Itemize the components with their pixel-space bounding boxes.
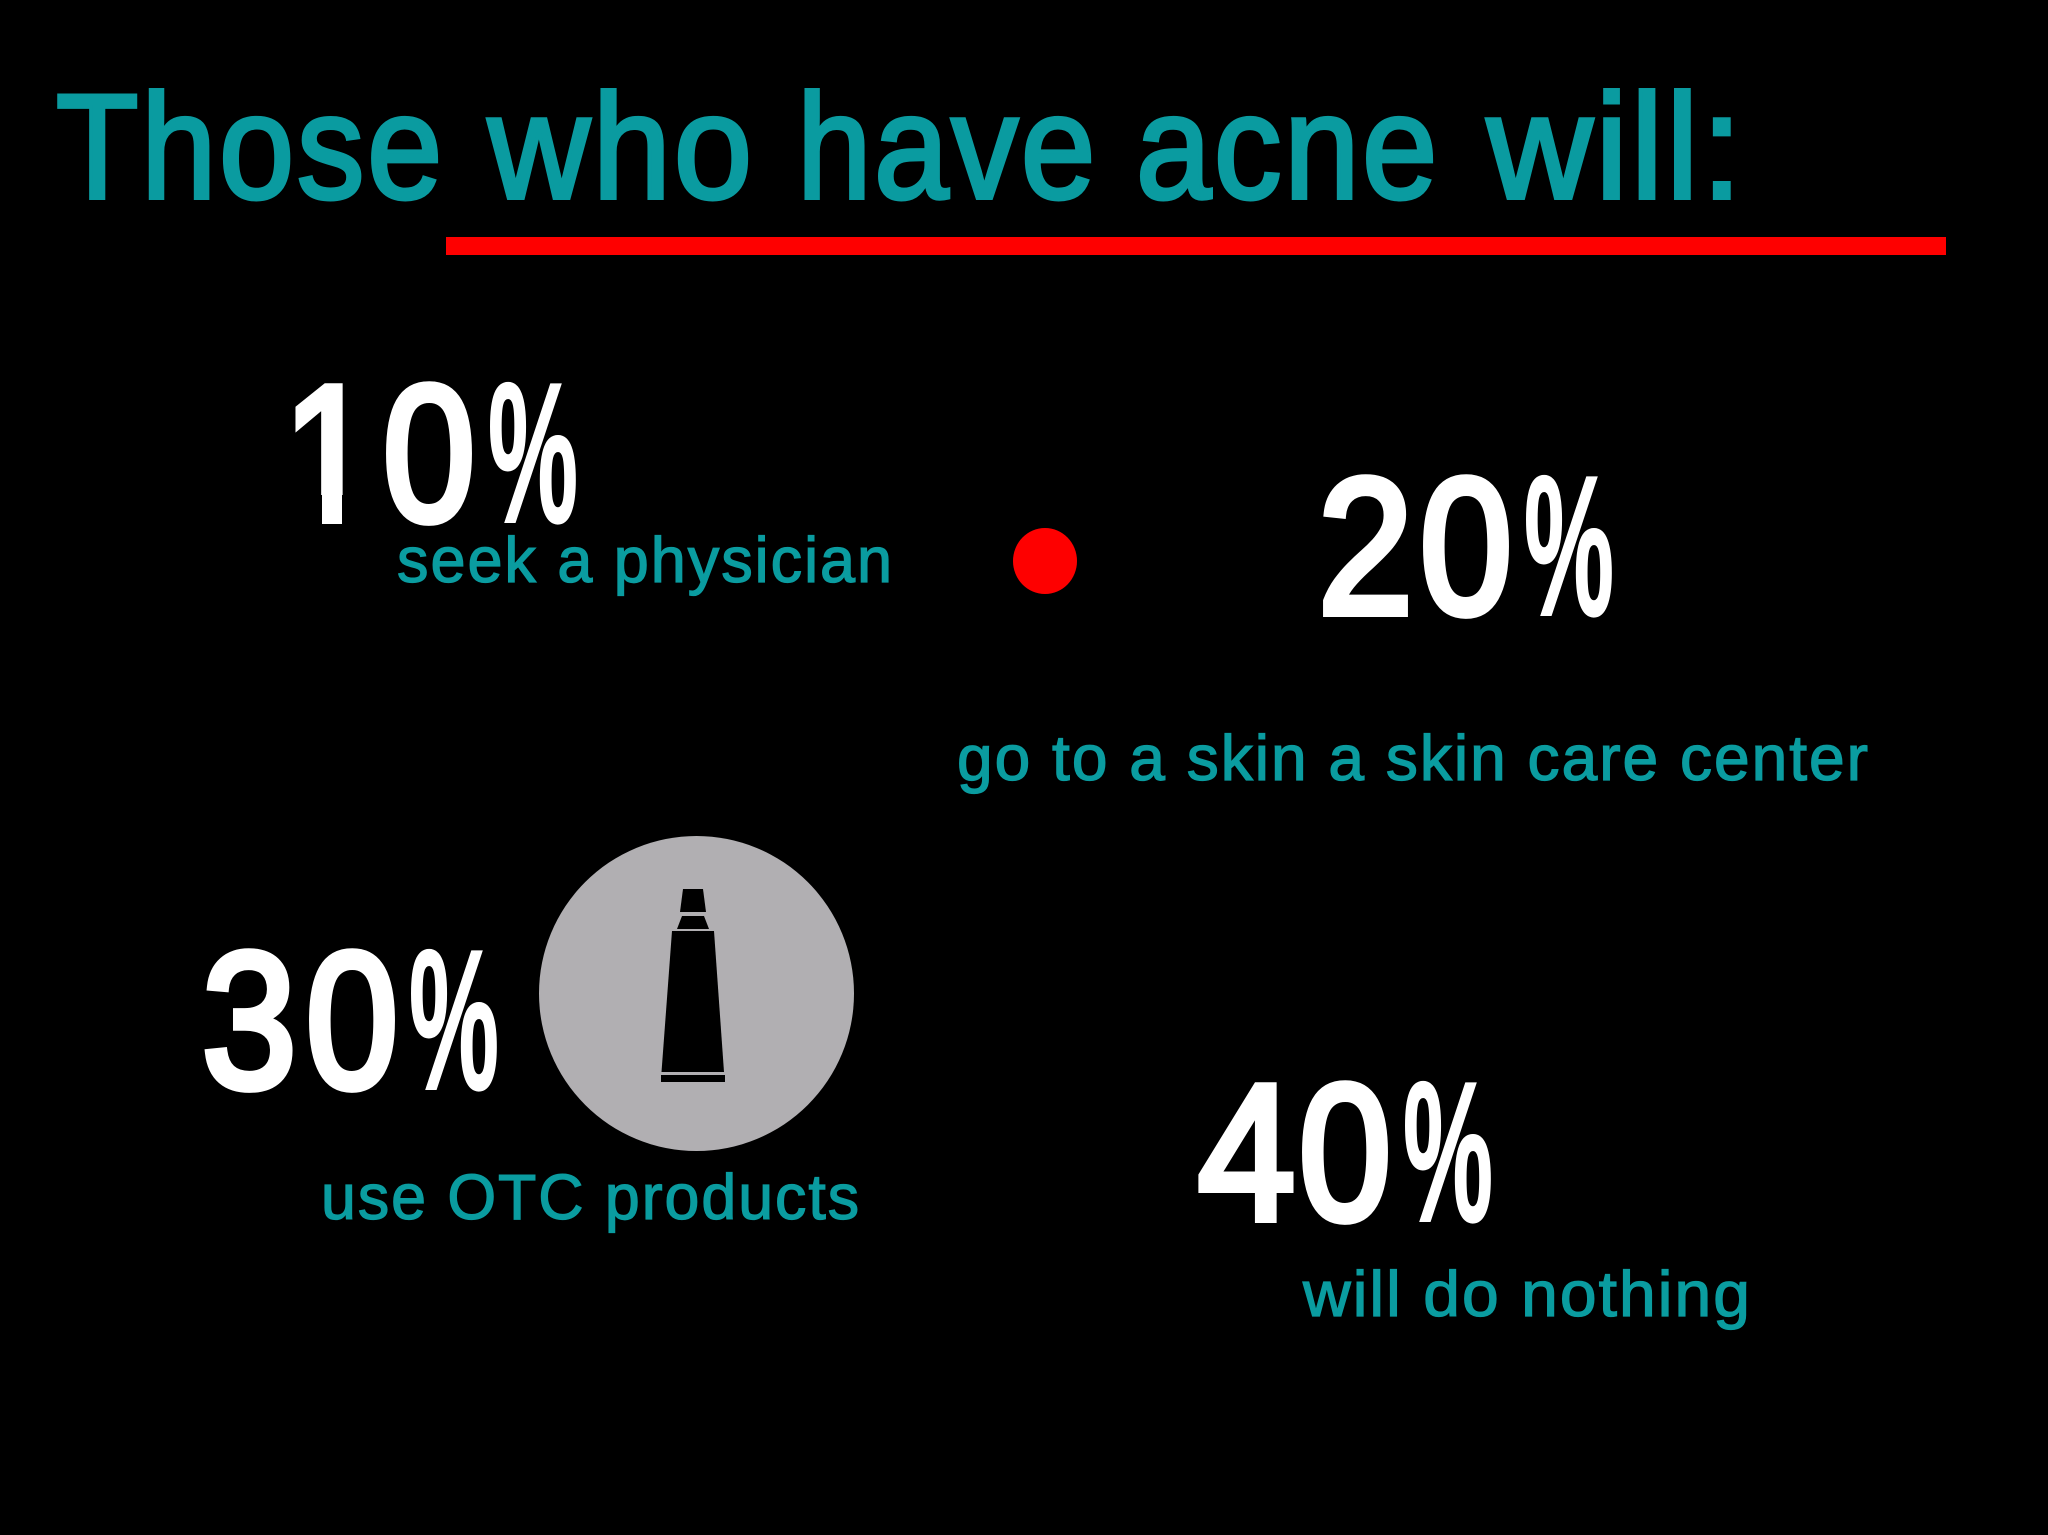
stat: 20% go to a skin care center	[957, 435, 1870, 794]
label: will do nothing: will do nothing	[1302, 1258, 1752, 1330]
number: 30%: 3	[202, 912, 296, 1128]
number: 10%: 1	[283, 345, 375, 561]
label: go to a skin a skin care center: go to a skin a skin care center	[957, 722, 1870, 794]
number: 40%: %	[1403, 1041, 1493, 1264]
label: use OTC products: use OTC products	[321, 1161, 861, 1233]
red title underline	[446, 237, 1946, 255]
number: 10%	[276, 342, 578, 565]
label: seek a physician: seek a physician	[397, 524, 894, 596]
number: 20%: 0	[1420, 438, 1512, 654]
title: have	[797, 63, 1098, 230]
stat: 40% will do nothing	[1198, 1041, 1752, 1330]
number: 10%: %	[488, 342, 578, 565]
number: 20%	[1318, 435, 1614, 658]
number: 30%: %	[409, 909, 499, 1132]
number: 20%: %	[1524, 435, 1614, 658]
title: acne	[1136, 63, 1440, 230]
number: 40%: 4	[1198, 1044, 1295, 1260]
number: 40%: 0	[1299, 1044, 1391, 1260]
red dot	[1013, 528, 1077, 594]
title	[56, 63, 1745, 230]
stat: 30% use OTC products	[202, 909, 861, 1233]
stat: 10% seek a physician	[276, 342, 894, 596]
title: Those	[56, 63, 445, 230]
number: 30%	[202, 909, 499, 1132]
number: 40%	[1198, 1041, 1493, 1264]
icon: ointment tube in grey circle	[539, 836, 854, 1151]
number: 20%: 2	[1318, 438, 1413, 654]
number: 10%: 0	[383, 345, 475, 561]
title: who	[487, 63, 755, 230]
number: 30%: 0	[306, 912, 398, 1128]
title: will:	[1486, 63, 1745, 230]
